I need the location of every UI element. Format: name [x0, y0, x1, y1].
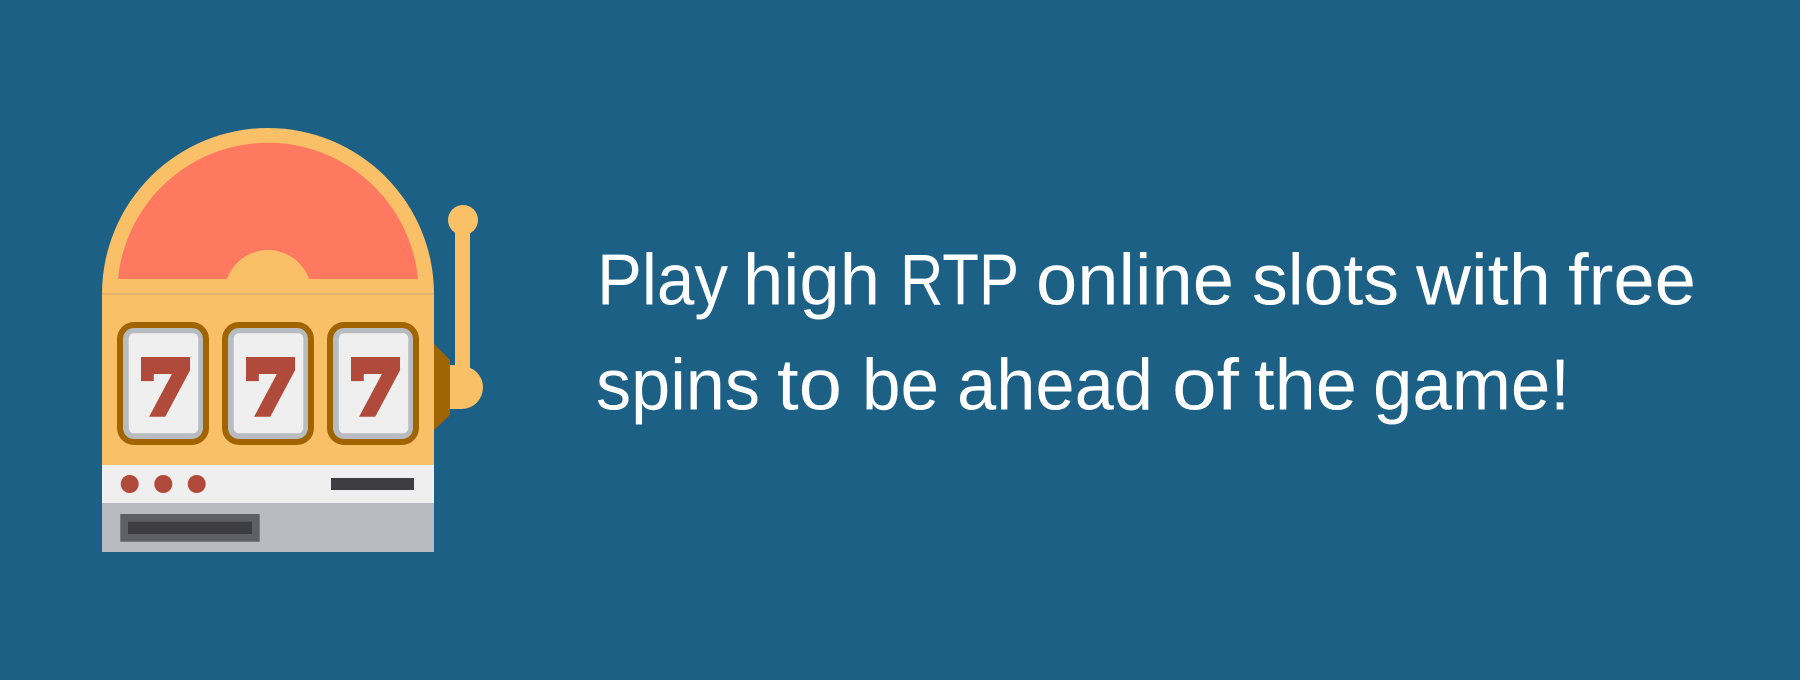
slogan line 1: with	[1415, 240, 1551, 320]
cabinet base with coin tray	[102, 503, 434, 552]
slogan line 2: of	[1172, 346, 1240, 426]
slogan line 1: free	[1568, 240, 1696, 320]
reel 2	[225, 325, 311, 442]
slogan line 2: spins	[596, 346, 760, 426]
reel 1: 7	[139, 346, 193, 430]
slogan text	[596, 240, 1696, 426]
reel 3	[330, 325, 416, 442]
control panel	[102, 465, 434, 503]
slogan line 2: game!	[1373, 346, 1570, 426]
slogan line 2: the	[1254, 346, 1357, 426]
reel 1	[120, 325, 206, 442]
cabinet dome	[102, 128, 434, 294]
slogan line 1: high	[743, 240, 880, 320]
reel 2: 7	[244, 346, 298, 430]
slogan line 1: online	[1036, 240, 1234, 320]
slogan line 2: ahead	[957, 346, 1153, 426]
slogan line 1: RTP	[900, 240, 1018, 320]
slogan line 2: to	[777, 346, 842, 426]
lever mount	[434, 344, 450, 430]
cabinet body	[102, 294, 434, 465]
icon: slot machine	[102, 128, 483, 552]
slogan line 1: Play	[597, 240, 728, 320]
reel 3: 7	[349, 346, 403, 430]
dome coral panel	[118, 143, 418, 279]
slogan line 2: be	[862, 346, 939, 426]
slogan line 1: slots	[1252, 240, 1399, 320]
lever arm with ball	[440, 205, 483, 409]
